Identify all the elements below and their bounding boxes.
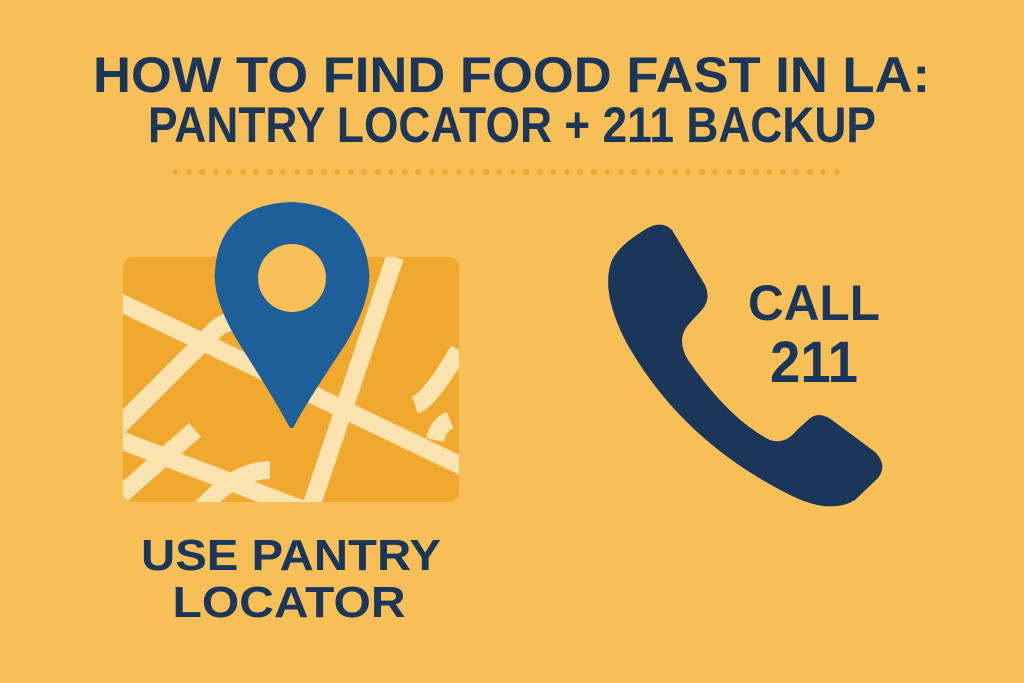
icon: phone handset: [608, 225, 882, 506]
icon: map: [123, 257, 459, 502]
label: use pantry locator: USE PANTRY: [141, 531, 441, 580]
label: use pantry locator: LOCATOR: [172, 578, 406, 627]
title: PANTRY LOCATOR + 211 BACKUP: [148, 97, 876, 153]
label: call 211: [748, 275, 880, 395]
title: [93, 47, 930, 153]
label: call 211: CALL: [748, 275, 880, 331]
label: call 211: 211: [770, 330, 858, 395]
label: use pantry locator: [141, 531, 441, 627]
dotted divider: [172, 169, 840, 175]
icon: location pin: [215, 202, 369, 428]
title: HOW TO FIND FOOD FAST IN LA:: [93, 47, 930, 103]
